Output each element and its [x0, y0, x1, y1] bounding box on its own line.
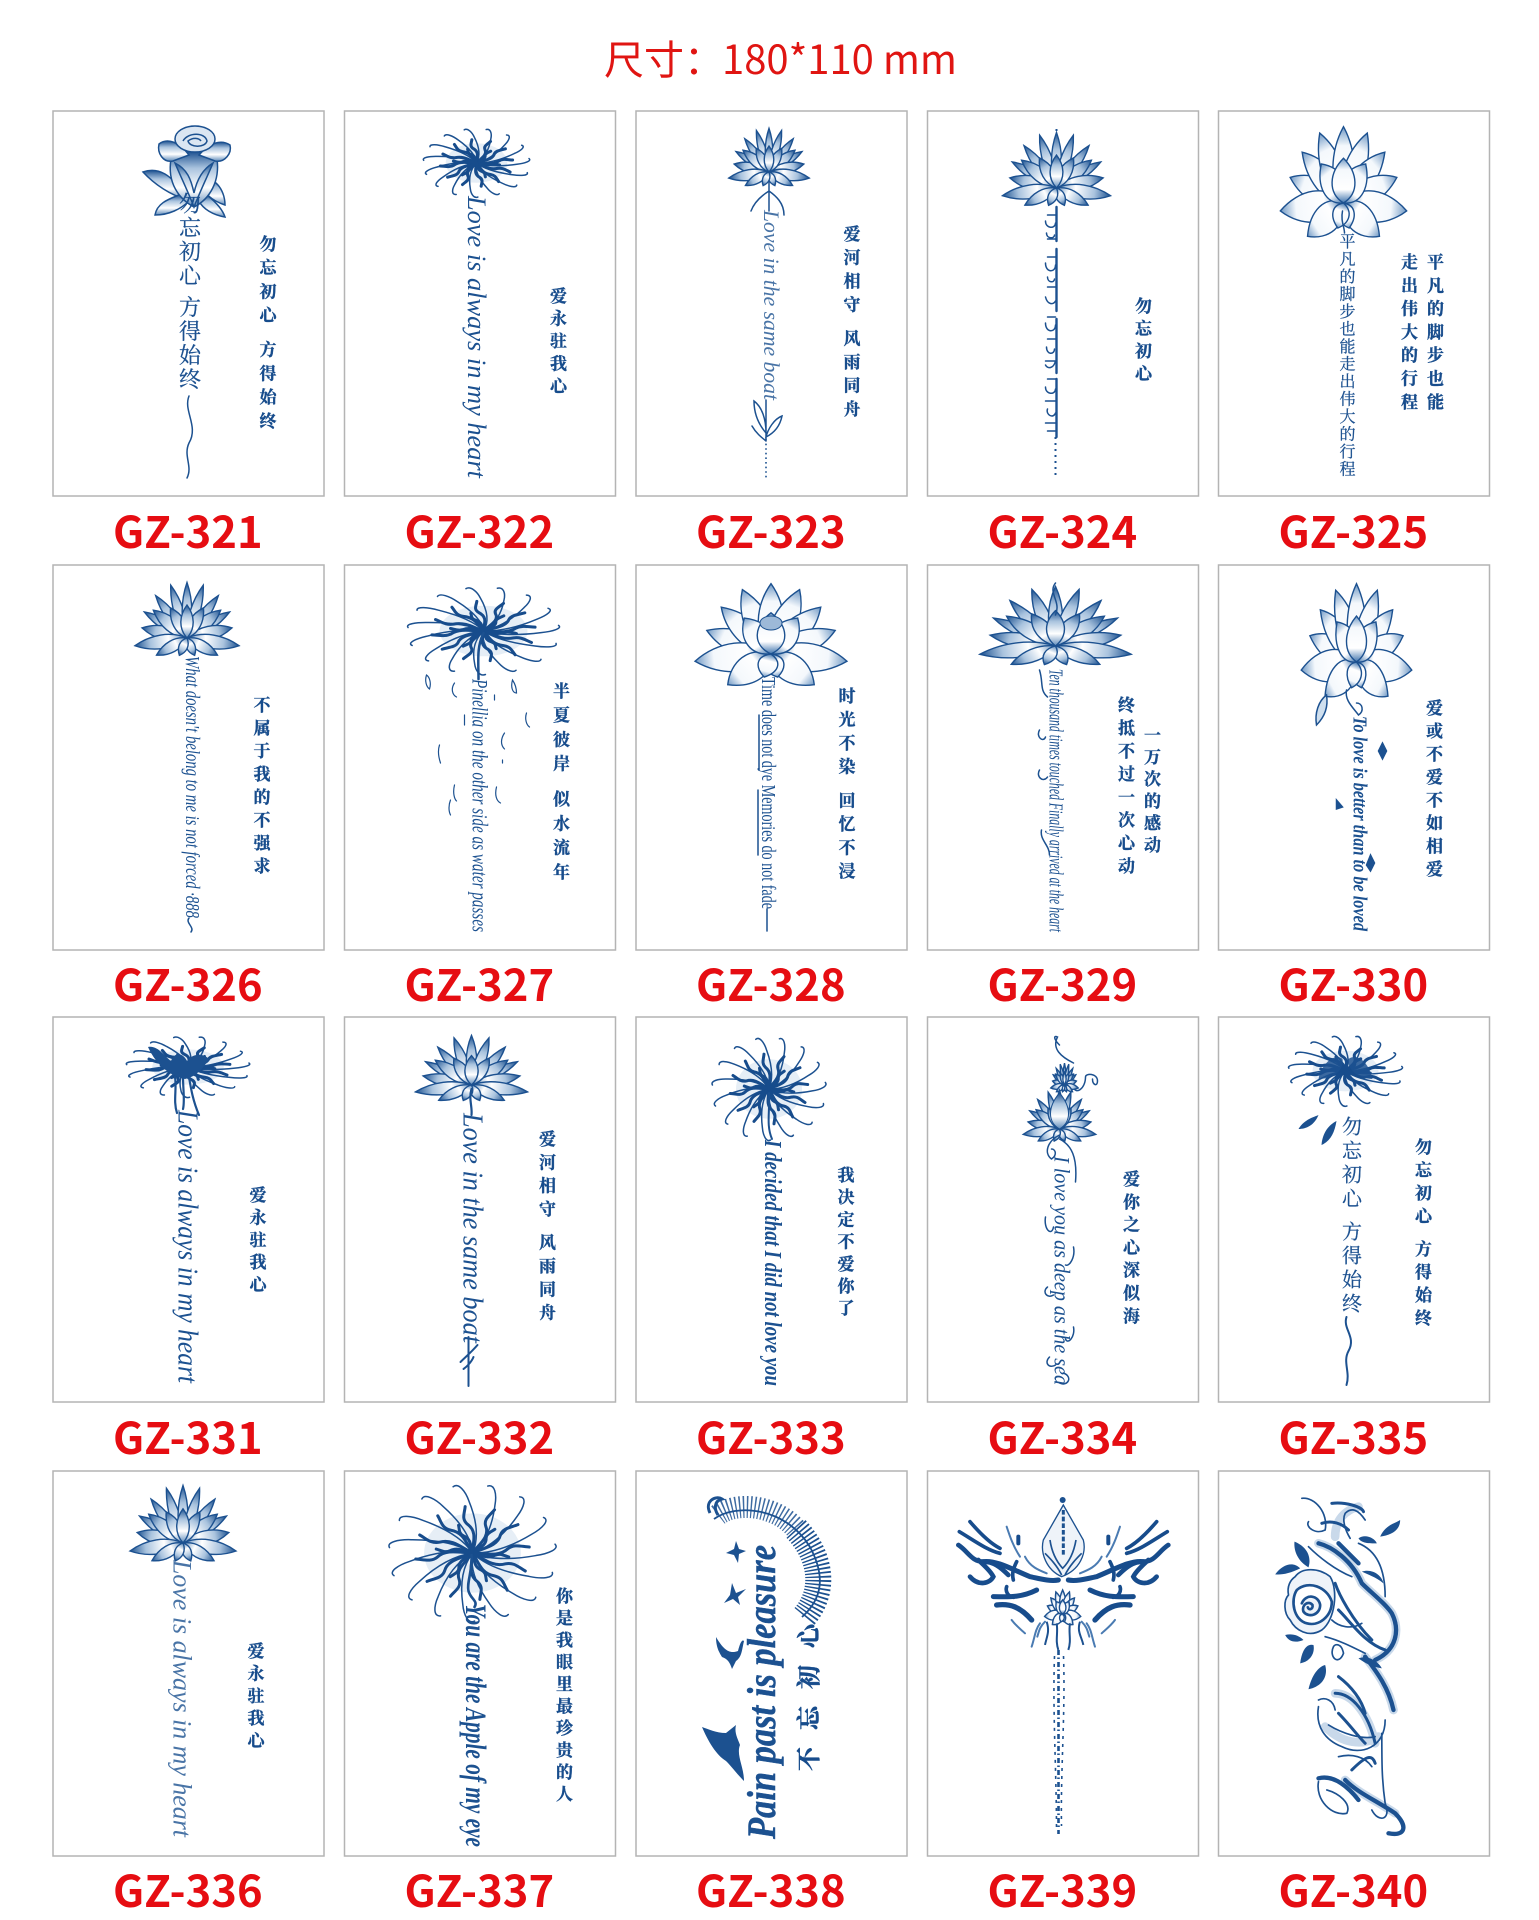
slogan: Pain past is pleasure [739, 1545, 784, 1840]
panel: GZ-323 [636, 111, 907, 561]
icon: lotus [129, 1485, 237, 1566]
product code: GZ-340 [1278, 1857, 1428, 1920]
icon: lotus [1002, 132, 1111, 210]
chinese caption: 爱或不爱不如相爱 [1423, 699, 1444, 883]
panel: GZ-332 [344, 1017, 616, 1467]
chinese caption: 勿忘初心 [1132, 297, 1152, 387]
top dots [1056, 129, 1058, 161]
icon: tribal wings [958, 1497, 1168, 1650]
tail [188, 918, 192, 932]
rose [1285, 1570, 1335, 1633]
central bud [1050, 1093, 1068, 1129]
icon: main lotus [1023, 1090, 1096, 1144]
spike [460, 1337, 478, 1386]
script: To love is better than to be loved [1348, 716, 1370, 932]
script: Ten thousand times touched Finally arrived at the heart [1044, 669, 1066, 932]
product code: GZ-325 [1278, 498, 1428, 561]
panel: GZ-326 [53, 565, 324, 1014]
icon: birds [702, 1637, 744, 1781]
script: Pinellia on the other side as water passes [468, 678, 492, 932]
chinese caption: 爱永驻我心 [244, 1642, 265, 1754]
stem [478, 633, 484, 679]
panel: GZ-321 [53, 111, 324, 561]
product code: GZ-324 [988, 498, 1137, 561]
panel: GZ-329 [928, 565, 1198, 1014]
panel: GZ-330 [1218, 565, 1490, 1014]
chinese caption: 平凡的脚步也能 [1424, 253, 1444, 416]
icon: lotus [1300, 584, 1413, 708]
product code: GZ-332 [404, 1404, 554, 1467]
chinese caption: 我决定不爱你了 [834, 1166, 855, 1321]
title: 180*110 mm [722, 28, 957, 86]
falling petals [1298, 1115, 1336, 1145]
script: Love is always in my heart [168, 1559, 196, 1838]
chinese caption left: 终抵不过一次心动 [1115, 696, 1134, 880]
icon: spider lily [423, 129, 530, 198]
script: I love you as deep as the sea [1050, 1155, 1074, 1385]
icon: lotus [134, 582, 240, 660]
panel: GZ-324 [928, 111, 1198, 561]
icon: large lotus [1279, 127, 1408, 248]
chinese caption: 爱你之心深似海 [1120, 1170, 1140, 1330]
product code: GZ-335 [1278, 1404, 1428, 1467]
sprig [752, 400, 782, 441]
script: Love is always in my heart [172, 1109, 202, 1384]
panel: GZ-328 [636, 565, 907, 1014]
icon: large spider lily [388, 1485, 556, 1622]
icon: rose [143, 126, 230, 217]
panel: GZ-333 [636, 1017, 907, 1467]
script: Love in the same boat [456, 1112, 488, 1344]
chinese slogan: 不忘初心 [796, 1607, 823, 1771]
product code: GZ-321 [113, 498, 263, 561]
icon: lotus [728, 128, 810, 189]
product code: GZ-323 [696, 498, 846, 561]
dark petals [1318, 1057, 1372, 1079]
panel: GZ-331 [53, 1017, 324, 1467]
chinese caption: 勿忘初心 方得始终 [1412, 1138, 1432, 1332]
icon: lotus [415, 1035, 528, 1105]
chinese caption second column: 走出伟大的行程 [1398, 253, 1418, 416]
chinese caption right: 一万次的感动 [1141, 726, 1160, 858]
icon: feather [708, 1498, 820, 1617]
seed pod [760, 616, 782, 630]
stem [769, 1093, 772, 1139]
chinese caption: 爱永驻我心 [547, 287, 568, 400]
icon: spider lily [1288, 1036, 1403, 1107]
product code: GZ-331 [113, 1404, 263, 1467]
stem [470, 1089, 472, 1115]
panel: GZ-340 [1218, 1471, 1490, 1920]
ink tail [187, 396, 192, 478]
cursive chinese column: 勿忘初心 方得始终 [1338, 1116, 1362, 1317]
product code: GZ-338 [696, 1857, 846, 1920]
stars [724, 1541, 746, 1605]
product code: GZ-327 [404, 951, 554, 1014]
dotted tail [1054, 437, 1056, 479]
chinese caption: 不属于我的不强求 [250, 696, 270, 880]
chinese caption: 爱河相守 风雨同舟 [840, 225, 861, 424]
icon: chrysanthemum lily [712, 1038, 826, 1141]
product code: GZ-330 [1278, 951, 1428, 1014]
stem and leaves [1316, 690, 1386, 871]
chinese caption: 勿忘初心 方得始终 [256, 235, 276, 436]
stem [751, 181, 784, 215]
product code: GZ-328 [696, 951, 846, 1014]
script: Time does not dye Memories do not fade [757, 677, 779, 909]
chinese caption: 爱永驻我心 [246, 1186, 267, 1298]
script: What doesn't belong to me is not forced ·888 [181, 656, 203, 918]
panel: GZ-327 [344, 565, 616, 1014]
chinese caption: 时光不染 回忆不浸 [836, 687, 855, 886]
dark core [148, 1047, 209, 1079]
product code: GZ-334 [988, 1404, 1137, 1467]
panel: GZ-335 [1218, 1017, 1490, 1467]
cursive chinese column: 平凡的脚步也能走出伟大的行程 [1337, 233, 1355, 478]
panel: GZ-339 [928, 1471, 1198, 1920]
falling petals [426, 675, 530, 815]
top curl [1055, 1036, 1098, 1091]
mantra column [1046, 207, 1056, 437]
panel: GZ-334 [928, 1017, 1198, 1467]
panel: GZ-338 [636, 1471, 907, 1920]
script: Love in the same boat [759, 209, 784, 401]
stem strands [175, 1077, 199, 1115]
script: Love is always in my heart [462, 195, 491, 479]
icon: rose and script swirls [1275, 1498, 1403, 1834]
product code: GZ-322 [404, 498, 554, 561]
product code: GZ-337 [404, 1857, 554, 1920]
calligraphy swirls [1302, 1498, 1403, 1834]
script: I decided that I did not love you [759, 1139, 785, 1386]
scroll ornament [1045, 1135, 1076, 1384]
product code: GZ-326 [113, 951, 263, 1014]
dotted tail [765, 439, 767, 480]
shading under swirls [1318, 1507, 1396, 1813]
icon: small lotus [1051, 1063, 1078, 1094]
icon: dark spider lily [126, 1037, 250, 1098]
ink tail [1346, 1317, 1351, 1385]
product code: GZ-329 [988, 951, 1137, 1014]
title: 尺寸： [604, 28, 724, 86]
product code: GZ-339 [988, 1857, 1137, 1920]
icon: lotus [693, 584, 849, 695]
panel: GZ-325 [1218, 111, 1490, 561]
mantra tail [1054, 1650, 1064, 1834]
cursive chinese column: 勿忘初心 方得始终 [176, 192, 202, 392]
chinese caption: 爱河相守 风雨同舟 [536, 1130, 556, 1327]
flourishes [1038, 583, 1057, 855]
icon: wide lotus [979, 586, 1132, 670]
chinese caption: 半夏彼岸 似水流年 [550, 682, 570, 887]
icon: spider lily [407, 588, 560, 675]
chinese caption: 你是我眼里最珍贵的人 [552, 1587, 572, 1807]
stem [1342, 211, 1344, 233]
product code: GZ-333 [696, 1404, 846, 1467]
panel: GZ-337 [344, 1471, 616, 1920]
panel: GZ-336 [53, 1471, 324, 1920]
stem line [758, 715, 767, 931]
leaves [1275, 1520, 1400, 1689]
product code: GZ-336 [113, 1857, 263, 1920]
stem [468, 1555, 476, 1607]
panel: GZ-322 [344, 111, 616, 561]
